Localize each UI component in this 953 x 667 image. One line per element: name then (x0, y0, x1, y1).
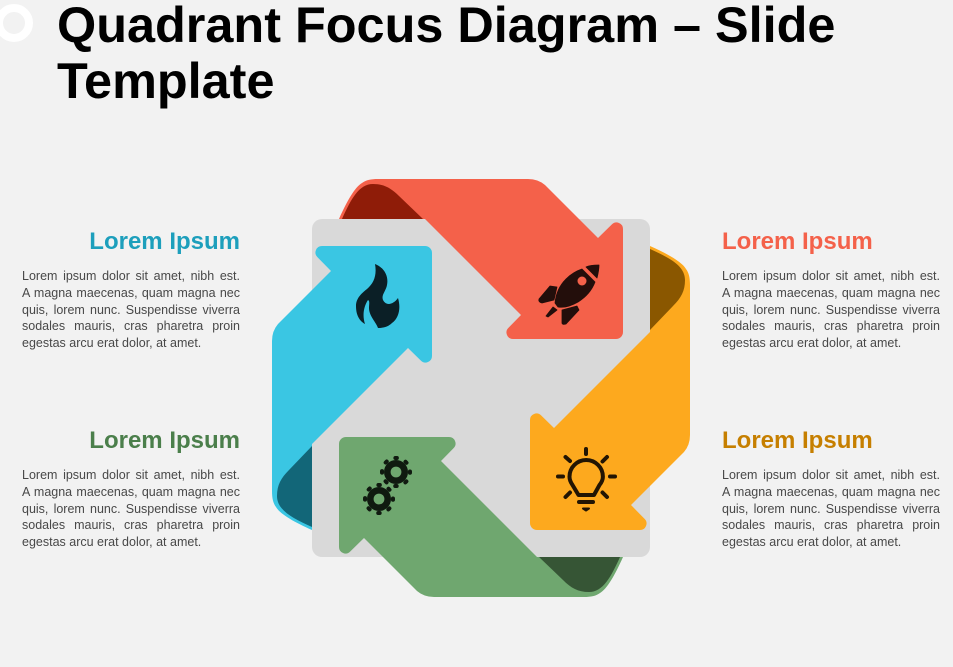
text: top right: A magna maecenas, quam magna nec (722, 286, 940, 300)
heading: bottom left: Lorem Ipsum (89, 427, 240, 454)
arrow: blue (272, 246, 432, 530)
heading: bottom right: Lorem Ipsum (722, 427, 873, 454)
text: top left: egestas arcu erat dolor, at amet. (22, 336, 201, 350)
text: top right (722, 269, 940, 350)
icon: flame (356, 264, 399, 328)
heading: top right: Lorem Ipsum (722, 228, 873, 255)
text: bottom right: sodales mauris, cras pharetra proin (722, 518, 940, 532)
grey center square (312, 219, 650, 557)
text: top right: quis, lorem nunc. Suspendisse viverra (722, 302, 940, 316)
text: bottom right: egestas arcu erat dolor, at amet. (722, 535, 901, 549)
text: bottom left: egestas arcu erat dolor, at amet. (22, 535, 201, 549)
text: bottom left: sodales mauris, cras pharetra proin (22, 518, 240, 532)
heading: top left: Lorem Ipsum (89, 228, 240, 255)
text: top left: A magna maecenas, quam magna nec (22, 286, 240, 300)
text: top left: quis, lorem nunc. Suspendisse viverra (22, 302, 240, 316)
text: top right: egestas arcu erat dolor, at amet. (722, 336, 901, 350)
arrow: green (339, 437, 623, 597)
text: top left: sodales mauris, cras pharetra proin (22, 319, 240, 333)
text: bottom left: A magna maecenas, quam magna nec (22, 485, 240, 499)
text: bottom right: quis, lorem nunc. Suspendisse viverra (722, 502, 940, 516)
icon: title ring bullet (0, 4, 33, 42)
text: top left: Lorem ipsum dolor sit amet, nibh est. (22, 269, 240, 283)
text: bottom left: Lorem ipsum dolor sit amet, nibh est. (22, 468, 240, 482)
text: bottom right (722, 468, 940, 549)
text: top right: Lorem ipsum dolor sit amet, nibh est. (722, 269, 940, 283)
text: bottom right: Lorem ipsum dolor sit amet, nibh est. (722, 468, 940, 482)
text: bottom right: A magna maecenas, quam magna nec (722, 485, 940, 499)
text: bottom left: quis, lorem nunc. Suspendisse viverra (22, 502, 240, 516)
text: top left (22, 269, 240, 350)
icon: light bulb (558, 449, 615, 510)
text: bottom left (22, 468, 240, 549)
icon: rocket (539, 265, 599, 324)
text: top right: sodales mauris, cras pharetra proin (722, 319, 940, 333)
arrow: red (339, 179, 623, 339)
icon: gears (365, 458, 410, 513)
arrow: orange (530, 246, 690, 530)
